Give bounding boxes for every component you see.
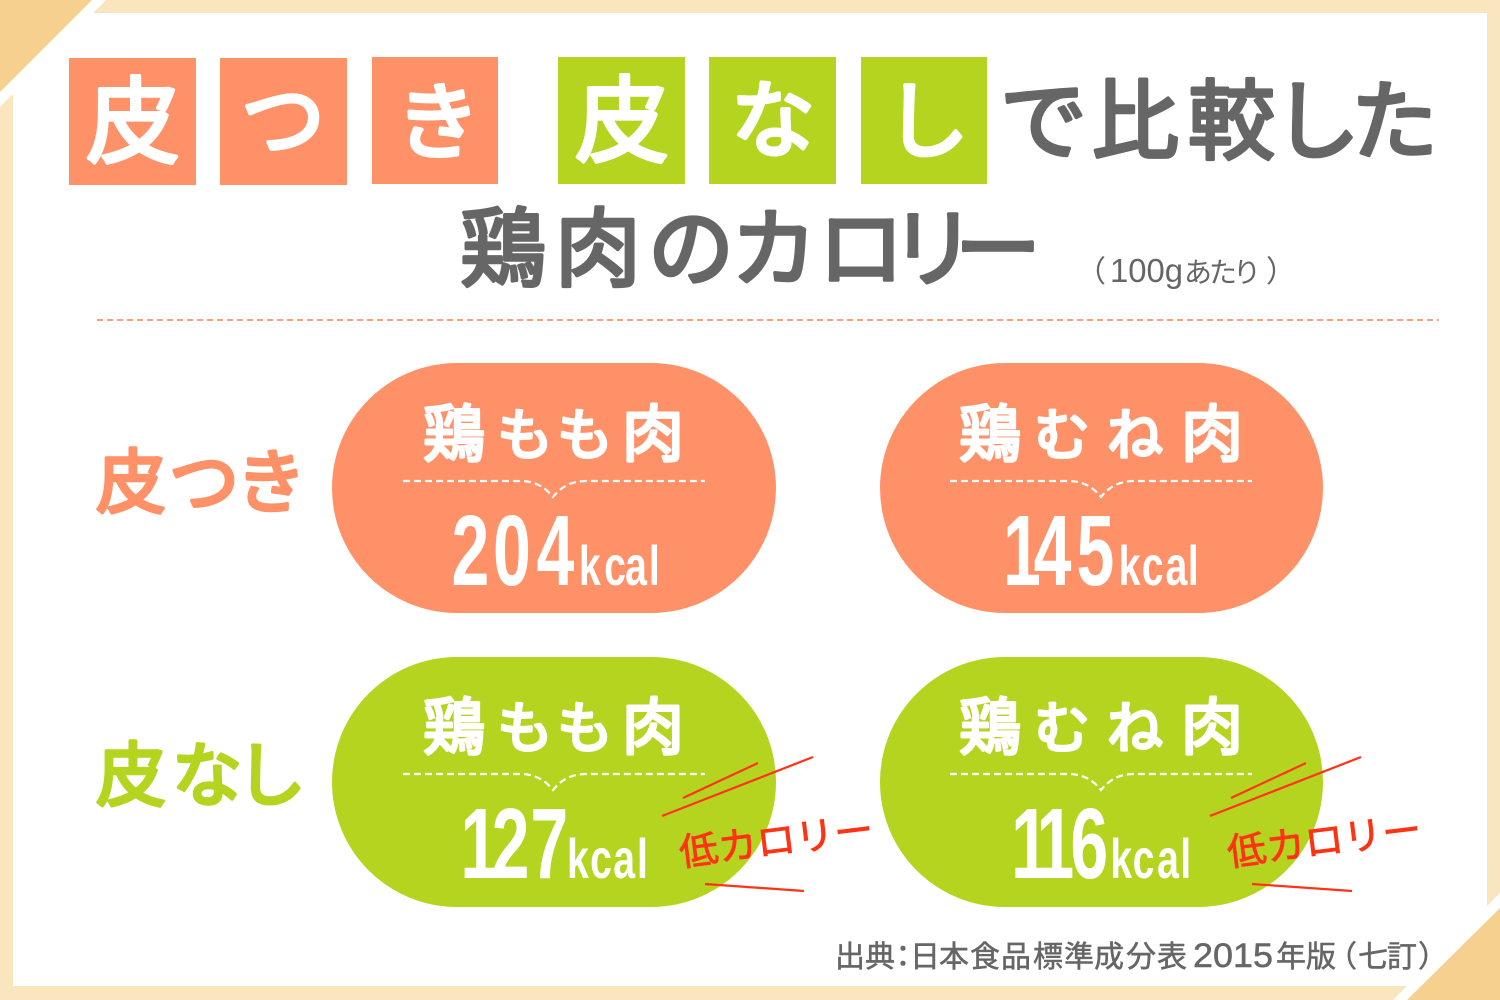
panel: breast with skin: 145 [1003, 496, 1114, 607]
panel: thigh with skin: kcal [579, 535, 660, 598]
callout: low calorie thigh: 低カロリー [677, 809, 876, 875]
panel: thigh without skin: kcal [567, 828, 648, 891]
panel: thigh with skin: もも [497, 404, 613, 467]
panel: thigh with skin: 肉 [622, 401, 684, 470]
callout: low calorie thigh [662, 757, 876, 891]
panel: breast with skin: 肉 [1181, 401, 1243, 470]
per 100g note: ） [1266, 256, 1296, 289]
panel: breast with skin: むね [1034, 404, 1163, 467]
panel: thigh without skin [332, 657, 776, 907]
row label: skin off: 皮なし [96, 737, 306, 815]
source note: 2015 [1193, 937, 1273, 975]
panel: thigh without skin: もも [497, 697, 613, 760]
title text: skin on: き [396, 76, 480, 170]
panel: breast without skin: むね [1034, 697, 1163, 760]
source note: 年版（七訂） [1276, 941, 1448, 974]
panel: thigh without skin: 肉 [622, 694, 684, 763]
panel: breast with skin: kcal [1119, 535, 1199, 598]
title boxes: skin off [558, 57, 987, 184]
title line 2: 鶏肉のカロリー [460, 202, 1041, 298]
row label: skin on: 皮つき [96, 444, 306, 522]
title line 1 [69, 57, 1438, 185]
panel: thigh without skin: 鶏 [423, 694, 485, 763]
callout: low calorie breast [1210, 757, 1424, 891]
panel: thigh without skin: 127 [460, 789, 568, 900]
per 100g note: （ [1076, 256, 1106, 289]
divider [97, 319, 1439, 321]
title text: skin on: 皮 [86, 70, 180, 175]
title text: skin off: 皮 [575, 69, 669, 174]
callout: low calorie breast: 低カロリー [1225, 809, 1424, 875]
per 100g note: 100g [1110, 252, 1183, 289]
title text: skin on: つ [241, 74, 325, 168]
panel: breast without skin: 鶏 [959, 694, 1021, 763]
panel: thigh with skin: 204 [452, 496, 575, 607]
panel: breast without skin: 116 [1011, 789, 1108, 900]
title text: compared: で比較した [1000, 74, 1438, 171]
per 100g note: あたり [1184, 257, 1261, 288]
title text: skin off: し [885, 75, 969, 169]
panel: thigh with skin: 鶏 [423, 401, 485, 470]
panel: breast with skin [880, 363, 1323, 613]
panel: breast with skin: 鶏 [959, 401, 1021, 470]
title text: skin off: な [731, 74, 815, 168]
title boxes: skin on [69, 57, 498, 185]
panel: thigh with skin [332, 363, 776, 613]
panel: breast without skin: 肉 [1181, 694, 1243, 763]
panel: breast without skin [880, 657, 1323, 907]
panel: breast without skin: kcal [1110, 828, 1191, 891]
source note: 出典：日本食品標準成分表 [835, 941, 1187, 974]
